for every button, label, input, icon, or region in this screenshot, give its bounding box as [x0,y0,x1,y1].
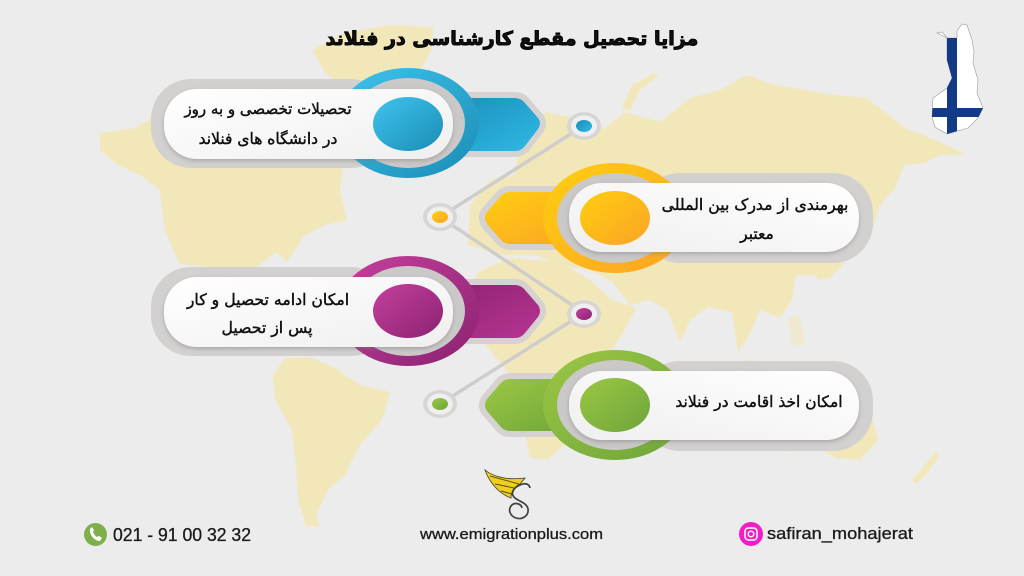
blue grey pill [151,79,391,168]
map: Kamchatka [884,172,901,195]
node: blue dot [567,112,601,140]
icon: Finland flag map [932,24,984,134]
icon: phone [84,523,107,546]
purple text: پس از تحصیل [222,318,312,338]
yellow arrow hexagon [485,192,585,244]
panel: purple [151,256,540,366]
yellow grey pill [640,173,873,263]
icon: instagram [739,522,763,546]
world map [100,25,967,527]
purple arrow hexagon [440,285,540,338]
blue inner disc [373,97,443,151]
purple inner disc [373,284,443,338]
phone number: 021 - 91 00 32 32 [113,525,251,545]
green ring [543,350,687,460]
map: Japan [815,258,846,280]
node: purple dot [567,300,601,328]
title: مزایا تحصیل مقطع کارشناسی در فنلاند [326,28,698,50]
connector lines [440,125,585,404]
green text: امکان اخذ اقامت در فنلاند [675,393,843,411]
purple grey pill [151,267,391,356]
panel: yellow [485,163,873,273]
map: Novaya Zemlya [622,73,658,110]
map: Eurasia [468,75,967,353]
blue arrow hexagon [440,98,540,151]
map: South America [273,357,390,527]
map: Australia [775,375,878,460]
green inner disc [580,378,650,432]
yellow white card [569,183,859,252]
blue text: تحصیلات تخصصی و به روز [183,100,352,118]
infographic canvas [84,24,984,546]
panel: green [485,350,873,460]
map: Greenland [312,25,433,95]
panel: blue [151,68,540,178]
purple ring [337,256,479,366]
map: Africa [463,258,636,460]
map: North America [100,88,347,345]
blue white card [164,89,453,159]
yellow text: بهرمندی از مدرک بین المللی [662,195,848,215]
instagram handle: safiran_mohajerat [767,525,913,543]
green grey pill [640,361,873,451]
map: New Zealand [912,452,940,484]
green arrow hexagon [485,379,585,431]
icon: winged S logo [485,470,530,519]
node: yellow dot [423,203,457,231]
purple text: امکان ادامه تحصیل و کار [186,290,349,310]
yellow inner disc [580,191,650,245]
purple white card [164,277,453,347]
green white card [569,371,859,440]
node: green dot [423,390,457,418]
map: Indonesia and Philippines [745,315,806,378]
website: www.emigrationplus.com [419,526,603,543]
yellow text: معتبر [739,225,774,243]
blue ring [337,68,479,178]
blue text: در دانشگاه های فنلاند [199,130,337,148]
yellow ring [543,163,687,273]
